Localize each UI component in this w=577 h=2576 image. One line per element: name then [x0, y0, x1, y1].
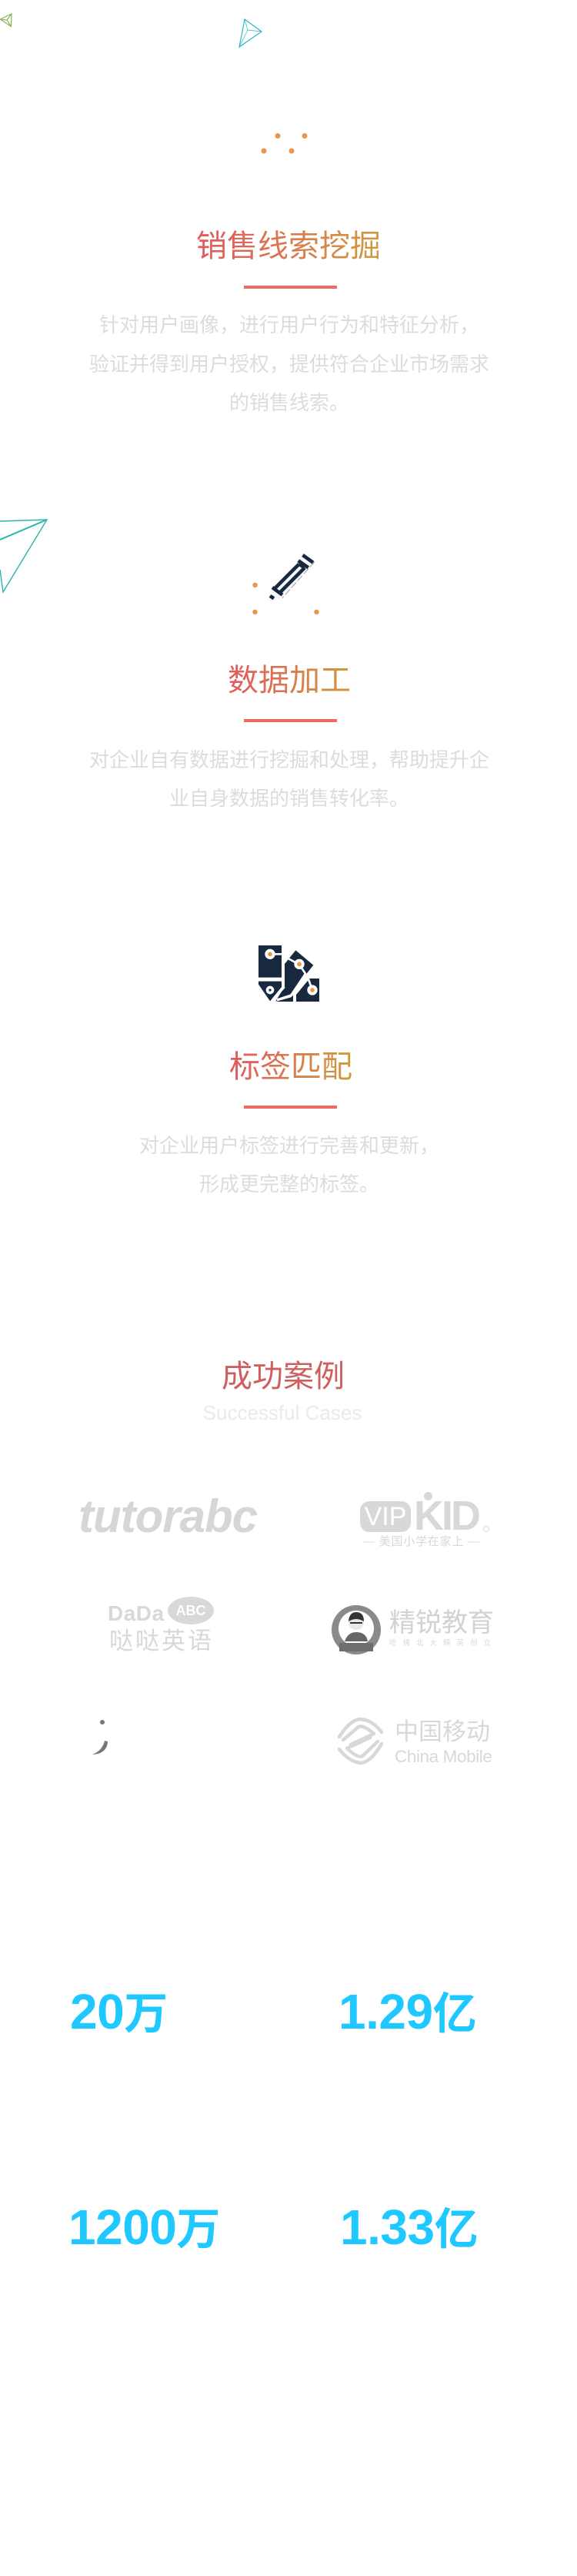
description text: 验证并得到用户授权，提供符合企业市场需求 — [89, 349, 489, 377]
decoration: large teal paper plane — [0, 519, 48, 594]
icon: pencil with dots — [252, 554, 319, 614]
description text — [139, 1130, 439, 1196]
logo: tutorabc: tutorabc — [78, 1490, 257, 1542]
section: tag matching — [139, 945, 439, 1196]
section: sales lead mining — [89, 133, 489, 414]
heading: successful cases — [203, 1360, 362, 1424]
heading: 标签匹配 — [229, 1050, 352, 1084]
icon: four orange dots — [262, 133, 308, 154]
stat: 133 million: 1.33亿 — [340, 2200, 479, 2255]
VIP badge: VIP — [365, 1502, 406, 1531]
heading English: Successful Cases — [203, 1401, 362, 1424]
mobile symbol — [337, 1717, 383, 1765]
description text: 对企业自有数据进行挖掘和处理，帮助提升企 — [89, 744, 489, 773]
tagline: — 美国小学在家上 — — [363, 1535, 480, 1548]
icon: circuit tags — [258, 945, 319, 1002]
logo: China Mobile — [337, 1717, 492, 1766]
brand tagline: 哈佛北大精英创立 — [389, 1639, 497, 1648]
heading Chinese: 成功案例 — [222, 1360, 345, 1393]
KID wordmark: KID — [414, 1493, 479, 1539]
stat: 12 million: 1200万 — [68, 2200, 220, 2255]
description text: 针对用户画像，进行用户行为和特征分析， — [99, 309, 479, 338]
logo: DaDa ABC — [108, 1597, 214, 1654]
heading underline — [244, 286, 337, 289]
ABC speech bubble: ABC — [175, 1603, 206, 1618]
section: data processing — [89, 554, 489, 810]
decoration: teal paper plane — [238, 18, 262, 48]
description text: 对企业用户标签进行完善和更新， — [139, 1130, 439, 1159]
description text — [89, 309, 489, 414]
stat: 129 million: 1.29亿 — [339, 1984, 477, 2039]
heading: 数据加工 — [228, 664, 351, 698]
brand name: 精锐教育 — [389, 1608, 494, 1638]
stat: 200k: 20万 — [70, 1984, 168, 2039]
DaDa wordmark: DaDa — [108, 1601, 165, 1625]
heading: 销售线索挖掘 — [196, 229, 381, 263]
heading underline — [244, 1106, 337, 1109]
registered mark — [483, 1526, 489, 1532]
Chinese name: 哒哒英语 — [109, 1628, 214, 1654]
logo: dot and curl mark — [92, 1720, 108, 1755]
badge with portrait — [332, 1605, 381, 1654]
description text — [89, 744, 489, 810]
figure head — [424, 1492, 432, 1500]
ABC speech bubble — [168, 1597, 214, 1624]
Chinese name: 中国移动 — [395, 1718, 490, 1745]
logo: Jingrui education — [332, 1605, 497, 1654]
heading underline — [244, 719, 337, 722]
logo: VIPKID — [360, 1492, 489, 1548]
description text: 的销售线索。 — [229, 391, 349, 414]
decoration: green paper plane — [0, 13, 12, 28]
description text: 形成更完整的标签。 — [199, 1173, 379, 1196]
description text: 业自身数据的销售转化率。 — [169, 787, 409, 810]
English name: China Mobile — [395, 1747, 492, 1766]
